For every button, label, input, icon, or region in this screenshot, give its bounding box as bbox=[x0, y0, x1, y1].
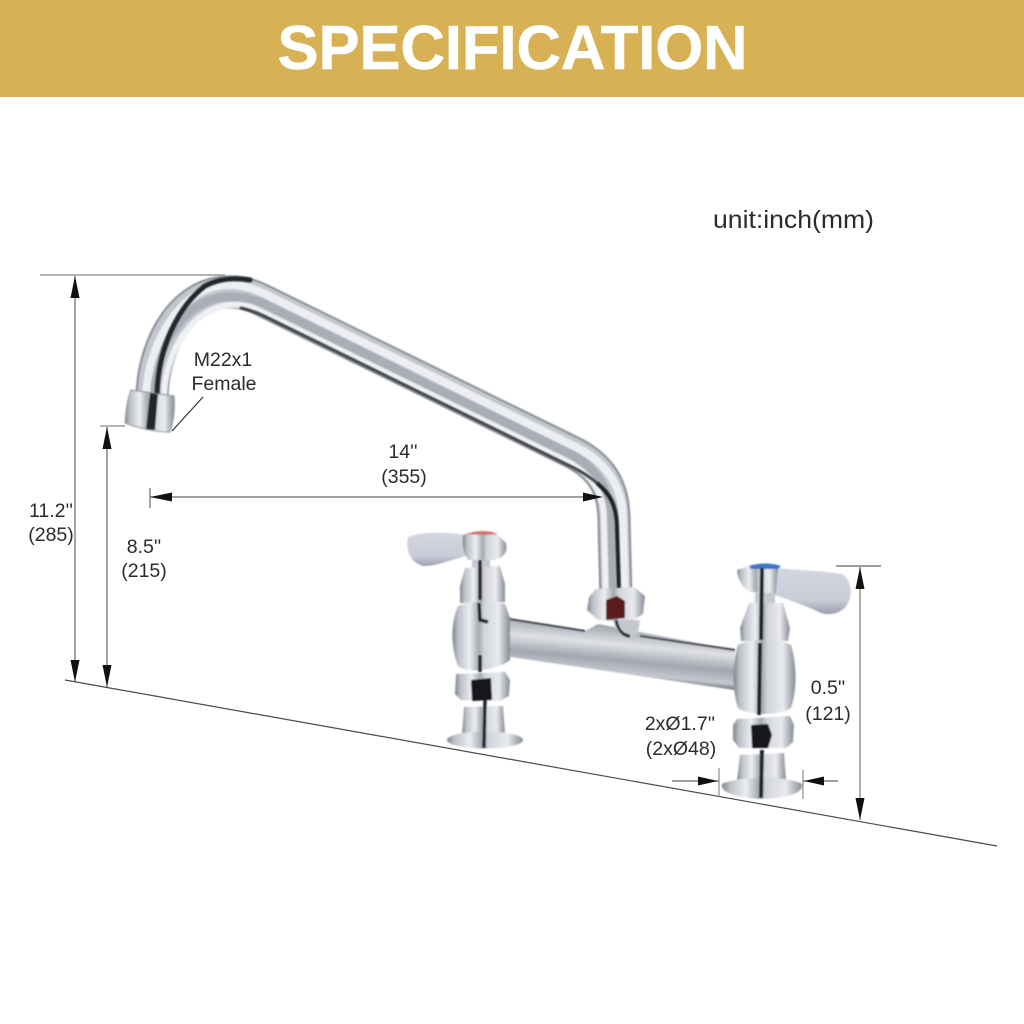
left handle lever bbox=[407, 533, 466, 566]
dimension: valve height: 0.5'' bbox=[811, 677, 845, 699]
dimension: spout reach 14: (355) bbox=[381, 466, 427, 488]
title: SPECIFICATION bbox=[278, 14, 748, 83]
header banner bbox=[0, 0, 1024, 97]
spout dark reflections bbox=[157, 279, 619, 592]
faucet illustration bbox=[125, 279, 851, 799]
mounting surface line bbox=[65, 680, 997, 846]
dimension: spout reach 14: 14'' bbox=[388, 441, 418, 463]
dimension: total height 11.2: (285) bbox=[28, 524, 74, 546]
label: outlet thread: Female bbox=[191, 373, 257, 395]
dimension: total height 11.2: 11.2'' bbox=[29, 500, 73, 522]
center spout nut bbox=[587, 587, 645, 637]
label: outlet thread bbox=[172, 349, 257, 431]
left valve column bbox=[407, 531, 523, 748]
label: outlet thread: M22x1 bbox=[194, 349, 252, 371]
dimension: valve height bbox=[805, 566, 881, 820]
spout tube bbox=[146, 285, 625, 600]
unit note: unit:inch(mm) bbox=[713, 206, 874, 234]
dimension: spout outlet height 8.5 bbox=[100, 426, 167, 687]
dimension: spout outlet height 8.5: 8.5'' bbox=[127, 536, 161, 558]
right handle lever bbox=[772, 568, 851, 614]
dimension: flange diameter bbox=[645, 713, 838, 799]
dimension: valve height: (121) bbox=[805, 703, 851, 725]
right valve column bbox=[722, 564, 851, 799]
spout outlet collar bbox=[125, 390, 174, 432]
dimension: spout reach 14 bbox=[150, 441, 603, 508]
dimension: flange diameter: (2xØ48) bbox=[646, 738, 716, 760]
dimension: spout outlet height 8.5: (215) bbox=[121, 560, 167, 582]
dimension: flange diameter: 2xØ1.7'' bbox=[645, 713, 715, 735]
horizontal body bar bbox=[490, 615, 735, 690]
dimension: total height 11.2 bbox=[28, 275, 225, 682]
